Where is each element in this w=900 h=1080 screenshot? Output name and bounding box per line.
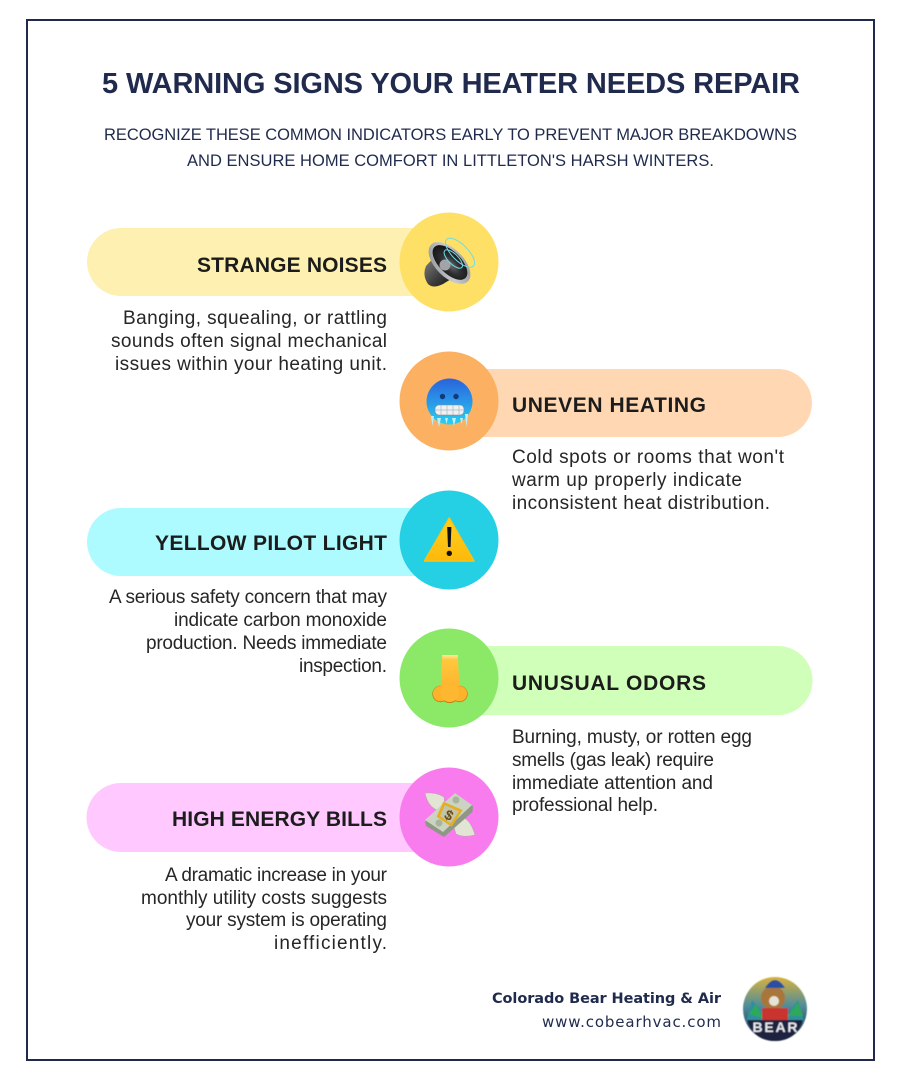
description: warm up properly indicate [511,470,742,491]
description [111,308,387,375]
description: sounds often signal mechanical [111,331,387,352]
panel: uneven heating [400,352,812,514]
description: professional help. [512,795,658,816]
description: inspection. [299,656,387,677]
subtitle: AND ENSURE HOME COMFORT IN LITTLETON'S HARSH WINTERS. [187,152,714,170]
title: 5 WARNING SIGNS YOUR HEATER NEEDS REPAIR [102,68,800,100]
subtitle: RECOGNIZE THESE COMMON INDICATORS EARLY TO PREVENT MAJOR BREAKDOWNS [104,126,797,144]
heading: UNUSUAL ODORS [512,672,706,695]
logo [743,977,807,1041]
panel: yellow pilot light [87,490,498,677]
description: your system is operating [186,910,387,931]
description: A serious safety concern that may [109,587,388,608]
icon: cold face [426,378,472,427]
icon: speaker [421,234,479,291]
footer: website: www.cobearhvac.com [542,1013,721,1031]
icon: money with wings [425,793,475,837]
description: Cold spots or rooms that won't [512,447,785,468]
icon: money with wings: $ [442,806,456,824]
heading: UNEVEN HEATING [512,394,706,417]
description: A dramatic increase in your [165,865,388,886]
icon circle [400,628,498,728]
icon: warning triangle [424,518,474,561]
description [141,865,388,954]
description: monthly utility costs suggests [141,888,387,909]
footer: company name: Colorado Bear Heating & Air [492,991,722,1007]
description: indicate carbon monoxide [174,610,387,631]
icon circle [400,352,498,450]
subtitle [104,126,797,170]
description: issues within your heating unit. [115,354,387,375]
icon circle [400,768,498,866]
description: inefficiently. [274,933,387,954]
description: Burning, musty, or rotten egg [512,727,752,748]
pill [87,508,450,576]
pill [449,369,812,437]
pill [87,228,450,296]
description: immediate attention and [512,773,713,794]
description [109,587,388,677]
description: inconsistent heat distribution. [512,493,770,514]
icon: nose [432,655,468,703]
logo: BEAR [752,1019,798,1035]
description [511,447,785,514]
heading: HIGH ENERGY BILLS [172,808,387,831]
heading: YELLOW PILOT LIGHT [155,532,387,555]
description: smells (gas leak) require [512,750,714,771]
panel: unusual odors [400,628,813,816]
panel: high energy bills [87,768,499,954]
panel: strange noises [87,212,499,375]
heading: STRANGE NOISES [197,254,387,277]
icon circle [400,490,498,590]
description [512,727,752,816]
icon circle [400,212,498,312]
pill [87,783,450,852]
description: Banging, squealing, or rattling [123,308,387,329]
description: production. Needs immediate [146,633,387,654]
pill [449,646,813,715]
